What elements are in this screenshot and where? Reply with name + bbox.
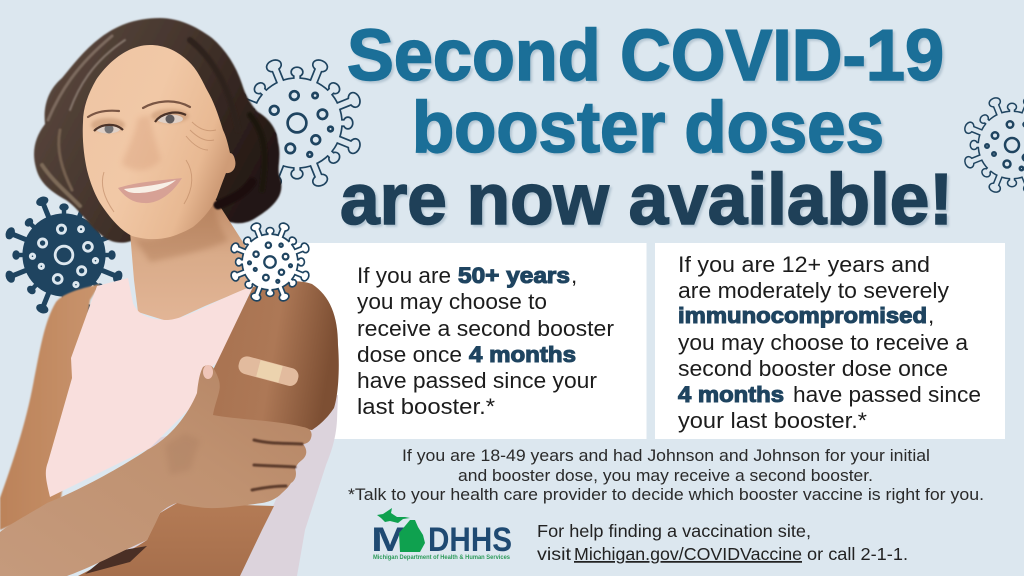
bandage <box>237 355 300 388</box>
hand knuckle shading <box>165 433 200 475</box>
title line 2: booster doses <box>412 88 884 168</box>
icon: solid dark virus <box>4 195 124 315</box>
eligibility note: and booster dose, you may receive a second booster. <box>458 467 873 485</box>
panel text: immunocompromised: If you are 12+ years and <box>678 252 930 277</box>
title line 3: are now available! <box>340 160 953 240</box>
neck <box>130 200 255 322</box>
eligibility note <box>348 447 984 504</box>
panel text: 50+ years: , <box>571 263 577 288</box>
logo lettering M: M <box>371 521 409 559</box>
panel text: 50+ years: last booster.* <box>357 394 495 419</box>
icon: white virus on shoulder <box>231 223 309 301</box>
logo: Michigan map <box>377 508 425 552</box>
icon: outline virus right edge <box>964 97 1024 193</box>
panel text: 50+ years: 4 months <box>469 342 576 367</box>
pink sleeveless top <box>46 278 253 497</box>
panel text: 50+ years: have passed since your <box>357 368 598 393</box>
title <box>340 16 953 240</box>
woman photo illustration <box>0 18 339 576</box>
panel text: 50+ years: receive a second booster <box>357 316 615 341</box>
panel text: 50+ years: dose once <box>357 342 462 367</box>
upper arm <box>213 281 339 430</box>
help text: For help finding a vaccination site, <box>537 521 811 541</box>
jaw shadow on neck <box>134 202 228 262</box>
back hair <box>34 18 281 243</box>
face <box>83 45 235 239</box>
finger shadows <box>252 440 302 490</box>
panel text: immunocompromised: , <box>928 303 934 328</box>
panel text: immunocompromised: 4 months <box>678 382 784 407</box>
eligibility note: *Talk to your health care provider to decide which booster vaccine is right for you. <box>348 486 984 504</box>
smile <box>118 178 182 203</box>
panel text: immunocompromised: your last booster.* <box>678 408 867 433</box>
nose shading <box>122 115 161 170</box>
eye shadows <box>91 109 189 132</box>
panel text: 50+ years: 50+ years <box>458 263 570 288</box>
logo lettering DHHS: DHHS <box>428 521 512 559</box>
icon: outline virus behind hair <box>233 59 361 187</box>
shadow under forearm <box>85 546 147 574</box>
panel text: immunocompromised: immunocompromised <box>678 303 927 328</box>
help text: Michigan.gov/COVIDVaccine <box>574 544 802 564</box>
title line 1: Second COVID-19 <box>347 16 944 96</box>
forearm and hand <box>0 365 312 576</box>
panel text: immunocompromised: have passed since <box>793 382 981 407</box>
face wrinkles <box>102 122 216 212</box>
lower arm <box>78 503 274 576</box>
eligibility note: If you are 18-49 years and had Johnson and Johnson for your initial <box>402 447 930 465</box>
help text: or call 2-1-1. <box>807 544 908 564</box>
panel text: 50+ years <box>357 263 615 419</box>
help text: visit <box>537 544 571 564</box>
panel text: immunocompromised: second booster dose once <box>678 356 948 381</box>
left shoulder and arm <box>0 284 100 530</box>
panel text: 50+ years: you may choose to <box>357 289 547 314</box>
logo: MDHHS <box>371 508 512 561</box>
eyebrows <box>88 101 190 117</box>
hair highlights <box>42 36 265 206</box>
help text <box>537 521 908 564</box>
panel text: immunocompromised <box>678 252 981 433</box>
panel: immunocompromised <box>655 243 1005 439</box>
panel text: 50+ years: If you are <box>357 263 451 288</box>
eyes <box>94 113 186 134</box>
panel text: immunocompromised: you may choose to receive a <box>678 330 968 355</box>
panel: 50+ years <box>290 243 646 439</box>
logo caption: Michigan Department of Health & Human Services <box>373 554 510 561</box>
panel text: immunocompromised: are moderately to severely <box>678 278 950 303</box>
lavender lower top <box>112 395 338 576</box>
thumb nail <box>203 365 213 379</box>
